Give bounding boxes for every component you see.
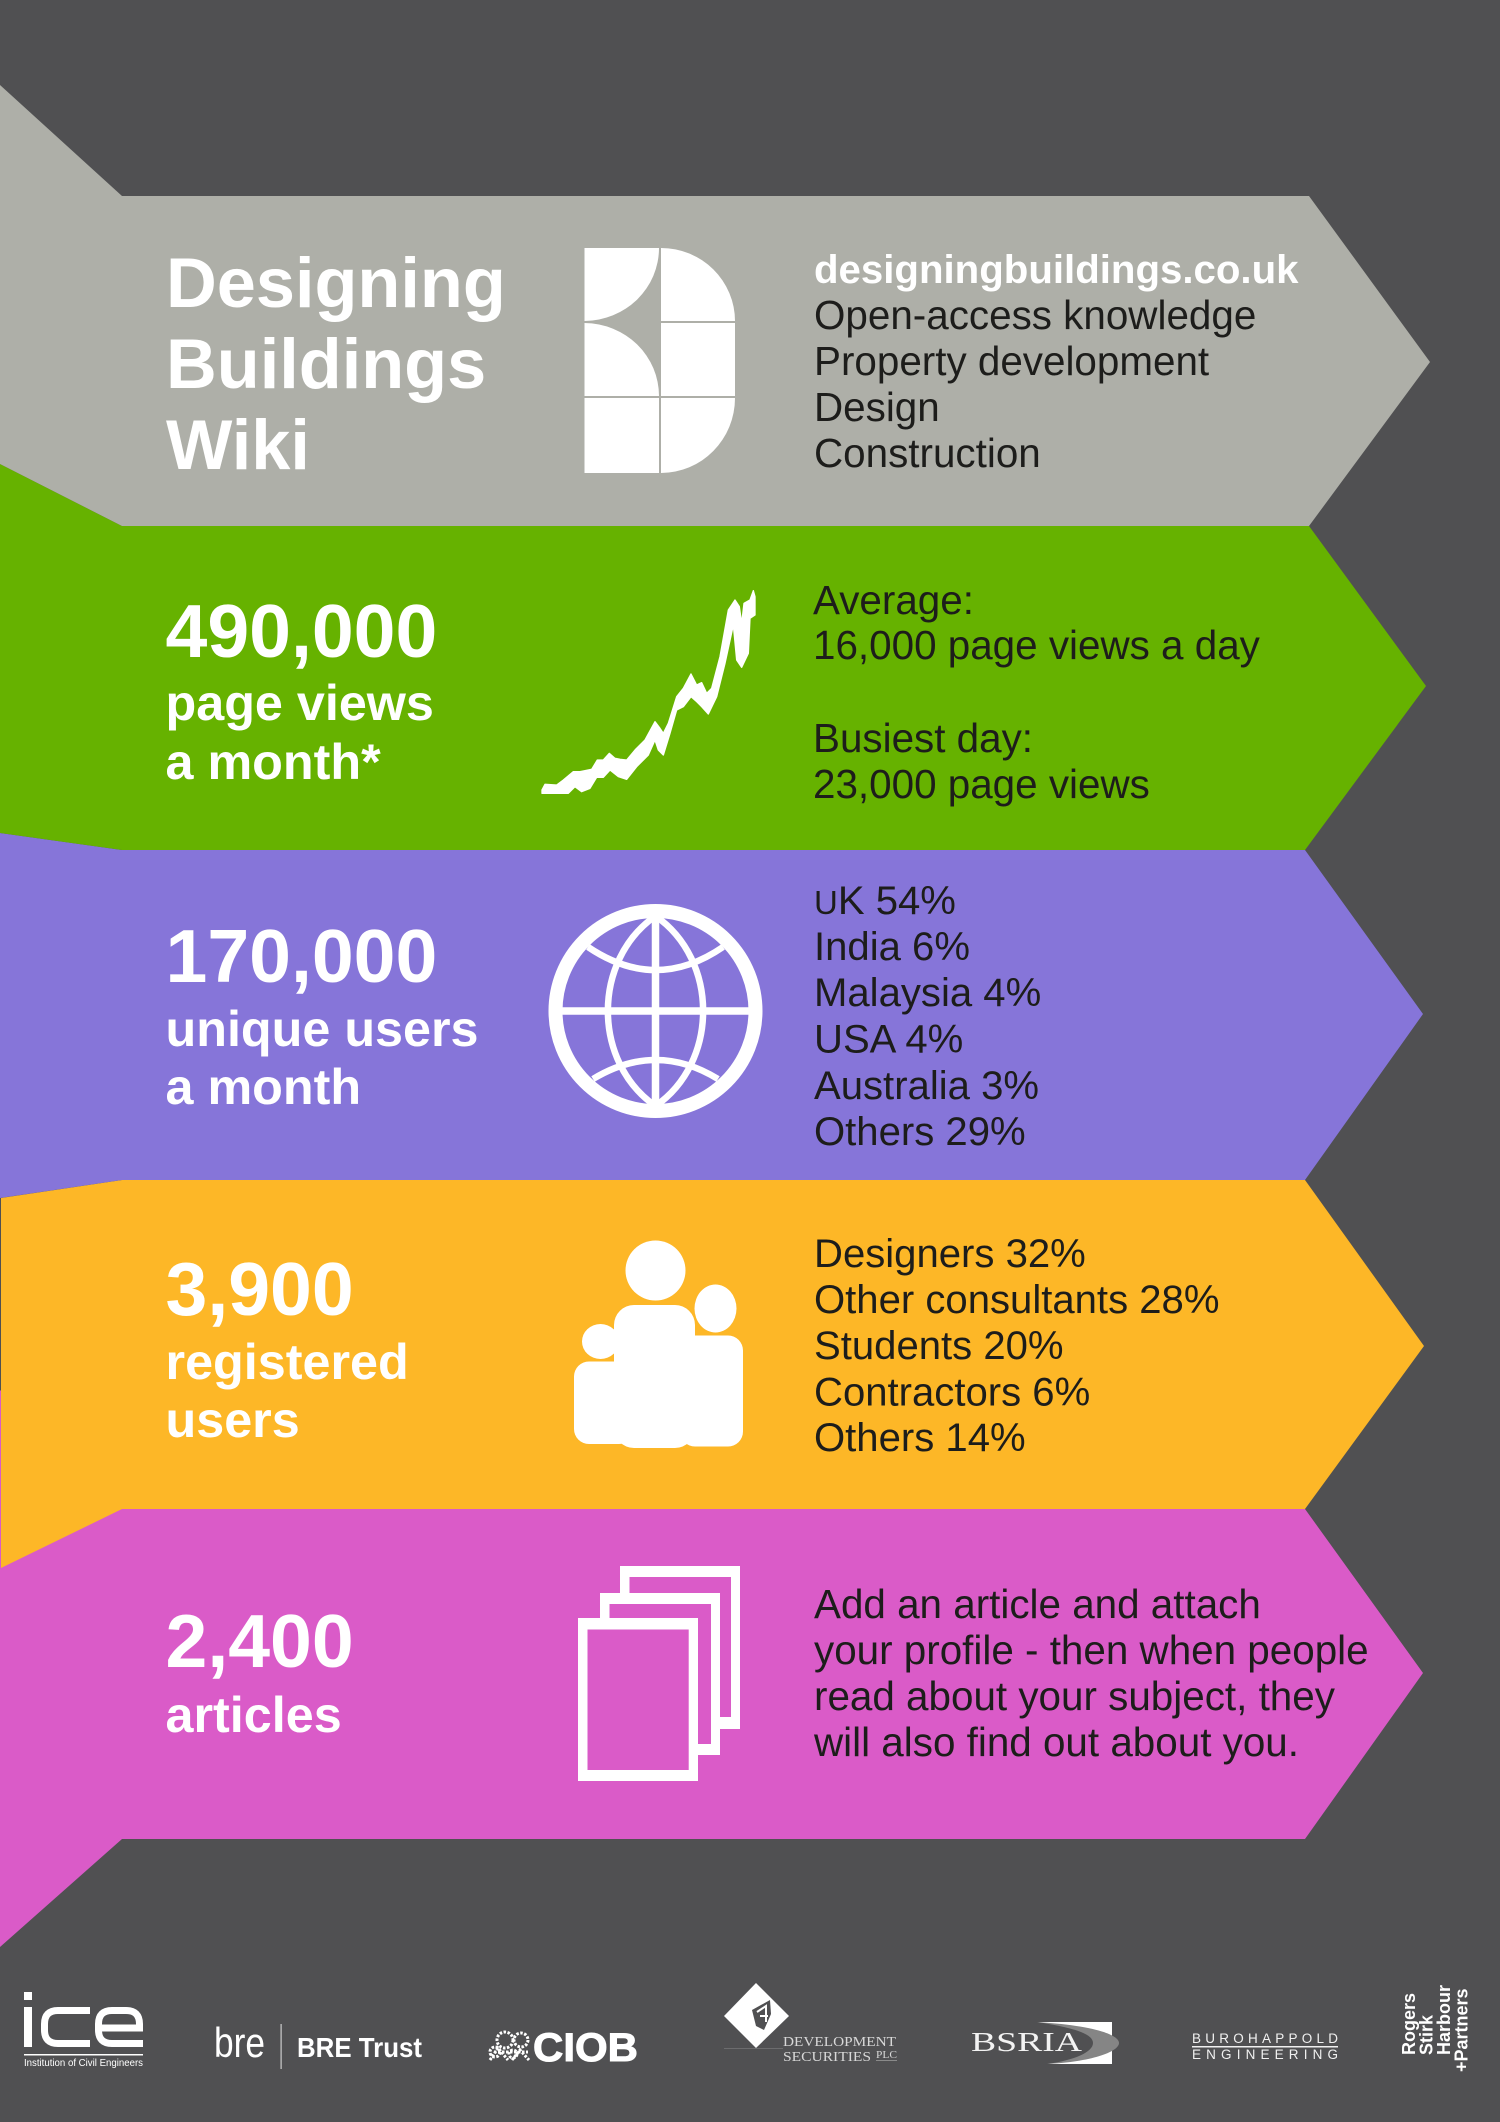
- logo: CIOB: CIOB: [533, 2026, 638, 2070]
- text block: article invitation: read about your subject, they: [814, 1673, 1336, 1719]
- icon: group of people: [574, 1240, 743, 1448]
- logo: CIOB: [490, 2026, 638, 2070]
- logo: ICE: [24, 1992, 143, 2069]
- logo: BRE Trust: BRE Trust: [297, 2032, 422, 2063]
- logo: Rogers Stirk Harbour + Partners: +Partners: [1452, 1988, 1472, 2072]
- text block: user types: Students 20%: [814, 1324, 1064, 1368]
- text block: countries: Australia 3%: [814, 1064, 1039, 1108]
- text block: article invitation: your profile - then when people: [814, 1627, 1369, 1673]
- logo: Development Securities: DEVELOPMENT: [783, 2035, 896, 2050]
- logo: BuroHappold Engineering: BUROHAPPOLD: [1192, 2031, 1338, 2046]
- title: [166, 243, 506, 484]
- heading: 2,400 articles: [166, 1599, 354, 1743]
- heading: 490,000 page views: [166, 589, 437, 790]
- logo: Rogers Stirk Harbour + Partners: [1399, 1985, 1472, 2072]
- text block: countries: India 6%: [814, 925, 970, 969]
- text block: average and busiest day: Busiest day:: [813, 715, 1033, 761]
- title: Buildings: [166, 324, 486, 403]
- text block: average and busiest day: 16,000 page views a day: [813, 622, 1261, 668]
- logo: BRE Trust: bre: [214, 2019, 265, 2066]
- heading: 170,000 unique users: [166, 914, 479, 1115]
- heading: 3,900 registered users: users: [166, 1391, 300, 1448]
- text block: countries: UK 54%: [814, 879, 956, 923]
- text block: website and topics: [814, 247, 1299, 476]
- logo: BSRIA: BSRIA: [971, 2027, 1083, 2057]
- panel: orange registered users band: [1, 1180, 1424, 1568]
- heading: 170,000 unique users: a month: [166, 1058, 361, 1115]
- text block: article invitation: Add an article and attach: [814, 1581, 1261, 1627]
- logo: BRE Trust: [214, 2019, 422, 2069]
- text block: countries: Others 29%: [814, 1110, 1026, 1154]
- heading: 170,000 unique users: unique users: [166, 1000, 479, 1057]
- text block: website and topics: designingbuildings.co.uk: [814, 247, 1299, 292]
- text block: average and busiest day: 23,000 page views: [813, 761, 1150, 807]
- logo: Rogers Stirk Harbour + Partners: Harbour: [1434, 1985, 1454, 2055]
- heading: 2,400 articles: articles: [166, 1686, 342, 1743]
- panel: magenta articles band: [0, 1390, 1423, 1947]
- text block: average and busiest day: Average:: [813, 577, 974, 623]
- logo: BSRIA: [971, 2022, 1119, 2064]
- text block: user types: Contractors 6%: [814, 1370, 1090, 1414]
- logo: Development Securities: PLC: [876, 2050, 897, 2061]
- icon: stacked documents: [578, 1566, 740, 1781]
- heading: 490,000 page views: page views: [166, 674, 434, 731]
- text block: website and topics: Open-access knowledge: [814, 292, 1256, 338]
- text block: website and topics: Property development: [814, 338, 1209, 384]
- text block: user types: [814, 1232, 1219, 1460]
- text block: countries: USA 4%: [814, 1018, 963, 1062]
- heading: 2,400 articles: 2,400: [166, 1599, 354, 1683]
- text block: average and busiest day: [813, 577, 1261, 807]
- heading: 170,000 unique users: 170,000: [166, 914, 437, 998]
- text block: user types: Other consultants 28%: [814, 1278, 1219, 1322]
- panel: green page views band: [0, 464, 1426, 850]
- logo: Development Securities: [724, 1983, 897, 2065]
- text block: user types: Designers 32%: [814, 1232, 1086, 1276]
- title: Wiki: [166, 405, 310, 484]
- text block: countries: Malaysia 4%: [814, 971, 1041, 1015]
- heading: 3,900 registered users: registered: [166, 1333, 409, 1390]
- footer: partner logos: [24, 1983, 1472, 2072]
- text block: website and topics: Design: [814, 384, 940, 430]
- text block: countries: [814, 879, 1041, 1154]
- logo: BuroHappold Engineering: [1192, 2031, 1338, 2062]
- panel: grey title band: [0, 85, 1430, 526]
- text block: article invitation: [813, 1581, 1369, 1765]
- logo: Rogers Stirk Harbour + Partners: Stirk: [1416, 2014, 1436, 2055]
- logo: Rogers Stirk Harbour + Partners: Rogers: [1399, 1993, 1419, 2055]
- title: Designing: [166, 243, 506, 322]
- text block: website and topics: Construction: [814, 430, 1041, 476]
- heading: 490,000 page views: 490,000: [166, 589, 437, 673]
- logo: ICE: Institution of Civil Engineers: [24, 2057, 143, 2069]
- heading: 3,900 registered users: [166, 1247, 409, 1448]
- icon: Designing Buildings logo: [584, 248, 735, 473]
- heading: 3,900 registered users: 3,900: [166, 1247, 354, 1331]
- icon: globe: [555, 911, 756, 1111]
- text block: article invitation: will also find out about you.: [813, 1719, 1299, 1765]
- heading: 490,000 page views: a month*: [166, 733, 381, 790]
- logo: Development Securities: SECURITIES: [783, 2050, 871, 2065]
- chart: rising page views line: [542, 591, 755, 793]
- logo: BuroHappold Engineering: ENGINEERING: [1192, 2047, 1338, 2062]
- text block: user types: Others 14%: [814, 1416, 1026, 1460]
- panel: purple unique users band: [0, 833, 1423, 1198]
